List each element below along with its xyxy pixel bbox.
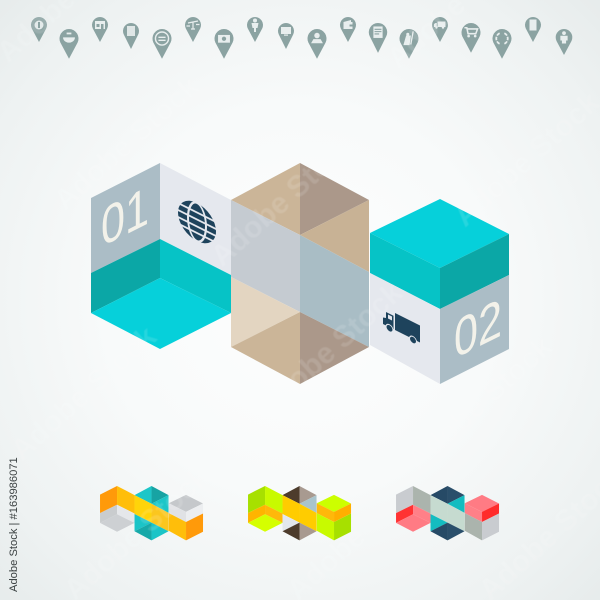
pin: door <box>525 17 541 42</box>
number 01: 01 <box>101 174 149 259</box>
pin: cycle arrows <box>492 29 512 59</box>
pin: shopping cart <box>461 23 481 53</box>
pin: 24 hours <box>152 29 172 59</box>
stock watermark: Adobe Stock <box>5 320 163 467</box>
cube 01 <box>91 163 231 349</box>
cube 02 <box>370 199 509 384</box>
pin: document <box>369 23 387 53</box>
pin: standing figure <box>556 29 572 55</box>
pin: wallet <box>340 17 356 42</box>
main isometric diagram <box>91 163 509 384</box>
pin: truck <box>432 17 448 42</box>
pin: user bust <box>307 29 327 59</box>
pin: monitor <box>278 23 294 49</box>
stock watermark: Adobe Stock <box>205 126 363 273</box>
number 02: 02 <box>454 286 502 371</box>
icon: truck <box>383 307 420 347</box>
middle translucent block <box>231 163 369 384</box>
small variant: orange and teal <box>100 486 203 540</box>
icon: globe <box>178 194 216 250</box>
pin: scales <box>185 17 201 42</box>
pin: info <box>31 17 47 42</box>
pin: worker with trolley <box>399 29 419 59</box>
pin: book <box>123 23 139 49</box>
small variant: lime and brown <box>248 486 351 540</box>
pin: shop <box>92 17 108 42</box>
pin: bowl <box>59 29 79 59</box>
stock id caption: Adobe Stock | #163986071 <box>8 457 20 592</box>
stock watermark: Adobe Stock <box>401 330 559 477</box>
pin: camera <box>214 29 234 59</box>
row of map pin icons <box>31 17 572 59</box>
stock watermark: Adobe Stock <box>48 70 206 217</box>
stock watermark: Adobe Stock <box>251 276 409 423</box>
small variant: coral and navy <box>396 486 499 540</box>
pin: person <box>247 17 263 42</box>
